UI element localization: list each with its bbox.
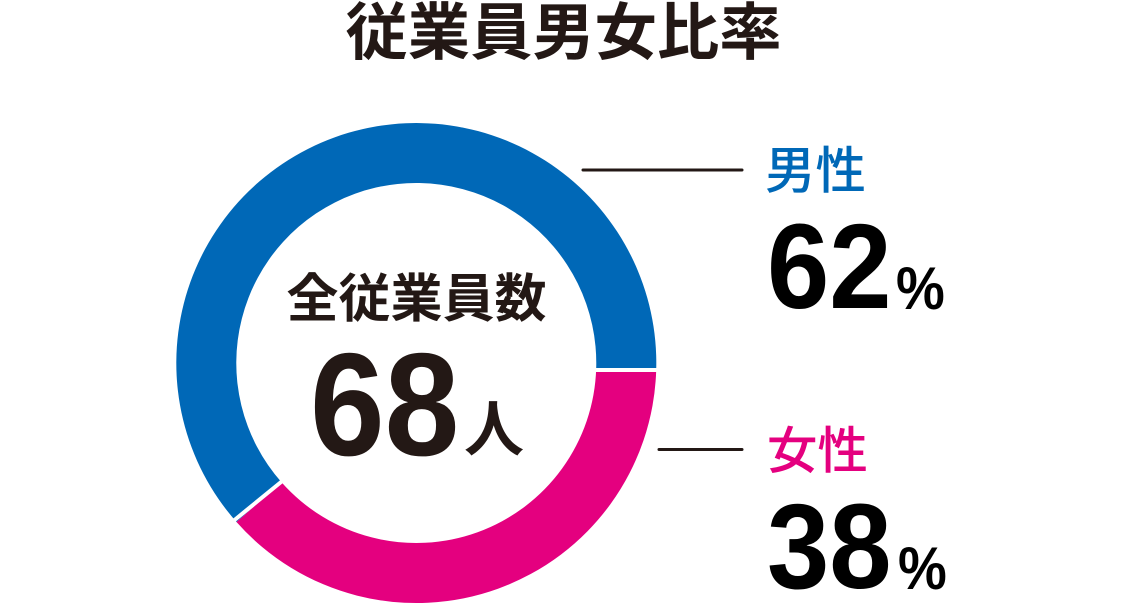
center value: 68 people: 人 <box>464 397 524 464</box>
segment divider lines <box>233 370 657 521</box>
donut segment: male 62% <box>176 123 656 522</box>
leader line: male <box>583 168 742 172</box>
center label: total employees: 全従業員数 <box>286 271 547 329</box>
leader line: female <box>659 448 742 451</box>
center value: 68 people: 68 <box>310 323 459 486</box>
female value: 38% <box>767 478 947 604</box>
donut segment: female 38% <box>236 368 656 603</box>
male value: 62%: 62 <box>767 198 892 334</box>
male label: 男性 <box>765 130 866 204</box>
female value: 38%: % <box>898 536 947 603</box>
male value: 62%: % <box>896 256 945 323</box>
donut chart <box>176 123 657 603</box>
center value: 68 people <box>310 323 524 486</box>
female label: 女性 <box>767 410 868 484</box>
title: 従業員男女比率 <box>346 0 782 68</box>
